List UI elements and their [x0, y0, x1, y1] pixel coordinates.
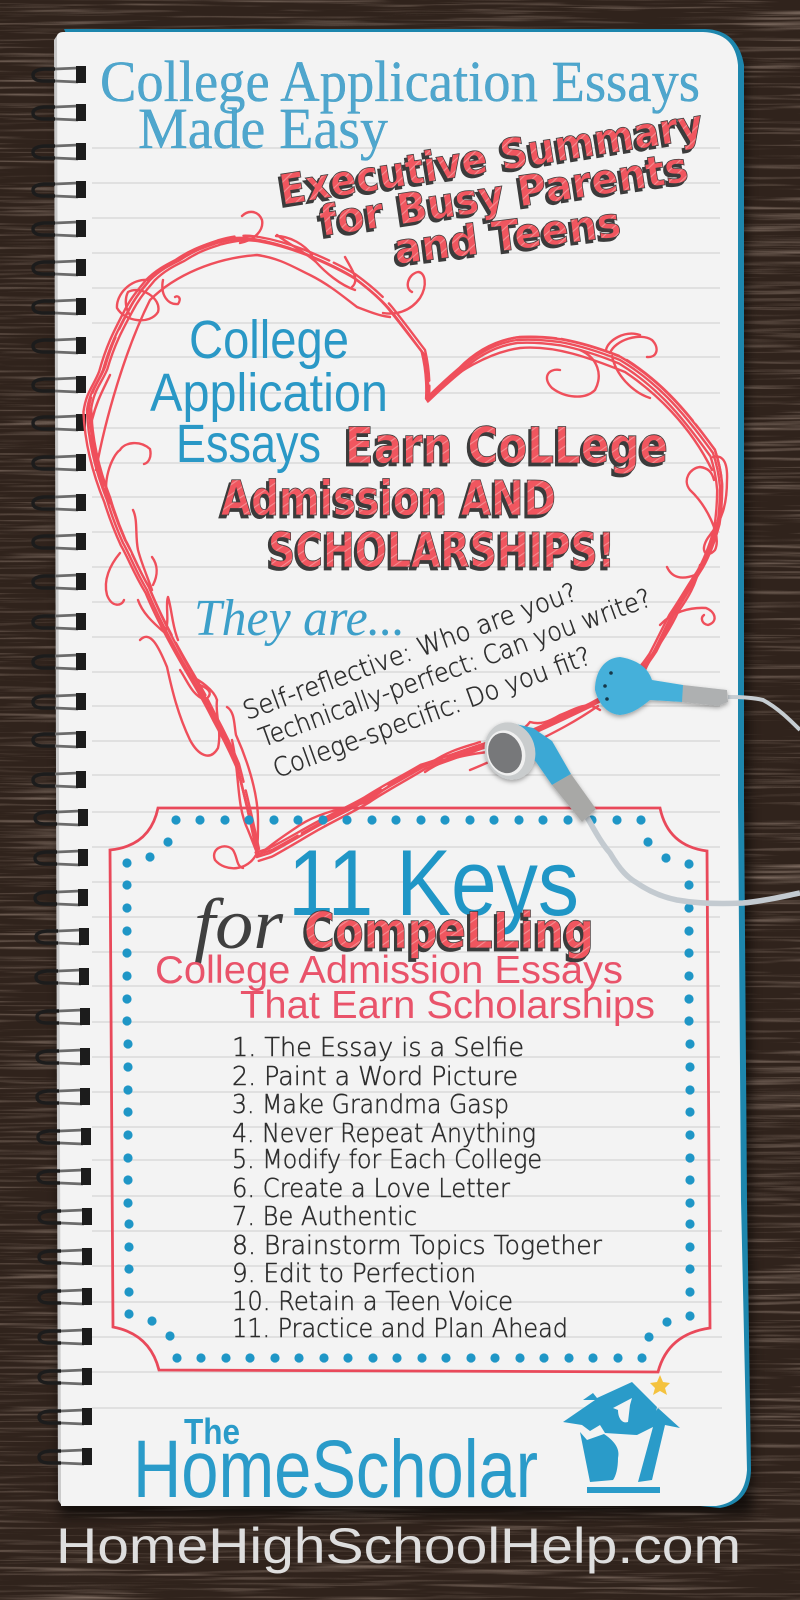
- list of 11 keys: 2. Paint a Word Picture: [232, 1062, 518, 1092]
- heading: college application essays: College: [189, 310, 349, 370]
- heading: earn college admission and scholarships: Admission AND: [221, 471, 556, 527]
- heading: 11 keys: 11 Keys: [288, 830, 579, 935]
- subtitle: executive summary: [276, 100, 706, 274]
- white cutout: [613, 1398, 632, 1422]
- list of 11 keys: 9. Edit to Perfection: [232, 1259, 476, 1289]
- three essay qualities: Technically-perfect: Can you write?: [255, 583, 655, 754]
- list of 11 keys: [232, 1033, 602, 1344]
- logo wordmark: HomeScholar: [133, 1424, 538, 1515]
- list of 11 keys: 7. Be Authentic: [232, 1202, 417, 1232]
- they are: They are...: [194, 590, 405, 647]
- cable: [587, 817, 800, 904]
- roof and upper body: [563, 1382, 657, 1435]
- lower right strands: [425, 706, 600, 772]
- heading: college application essays: [150, 310, 388, 474]
- inner strand, right lobe: [432, 348, 712, 470]
- left small curl: [162, 280, 180, 304]
- title: Made Easy: [138, 96, 388, 161]
- left mid curl: [106, 443, 151, 503]
- paper edge strip: [54, 34, 62, 1506]
- subheading: That Earn Scholarships: [240, 984, 655, 1027]
- top curl: [240, 212, 262, 243]
- list of 11 keys: 6. Create a Love Letter: [232, 1174, 510, 1204]
- inner strand, top left lobe: [96, 255, 390, 470]
- base bar: [587, 1487, 660, 1493]
- star: [650, 1375, 670, 1395]
- compelling: CompeLLing: [304, 902, 594, 960]
- heading: earn college admission and scholarships: Earn CoLLege: [345, 417, 668, 475]
- subtitle: executive summary: for Busy Parents: [316, 142, 691, 246]
- logo wordmark: The: [184, 1411, 240, 1452]
- list of 11 keys: 1. The Essay is a Selfie: [232, 1033, 524, 1063]
- heading: college application essays: Essays: [176, 414, 321, 474]
- title: [100, 49, 700, 161]
- website url: HomeHighSchoolHelp.com: [56, 1518, 741, 1574]
- grey stem: [552, 774, 596, 822]
- right side loops: [687, 456, 727, 554]
- right arrow: [638, 1408, 680, 1482]
- subtitle: executive summary: and Teens: [391, 198, 624, 274]
- three essay qualities: College-specific: Do you fit?: [269, 641, 595, 785]
- blue dotted border: [122, 815, 695, 1363]
- subtitle: executive summary: Executive Summary: [276, 100, 706, 215]
- heading: earn college admission and scholarships: [221, 417, 668, 579]
- blue cover: [64, 29, 751, 1508]
- grey housing: [477, 716, 543, 786]
- right top curl: [383, 272, 425, 314]
- spiral binding: [33, 66, 92, 1465]
- lower body: [580, 1432, 618, 1482]
- ruled lines: [92, 148, 722, 1408]
- right lobe curls: [610, 337, 657, 357]
- heading: college application essays: Application: [150, 363, 388, 423]
- subheading: [155, 949, 655, 1027]
- bottom loop: [214, 846, 257, 868]
- blue stem: [511, 723, 571, 785]
- heart scribble: [82, 212, 727, 868]
- cable: [728, 697, 800, 730]
- list of 11 keys: 10. Retain a Teen Voice: [232, 1287, 513, 1317]
- list of 11 keys: 3. Make Grandma Gasp: [232, 1090, 509, 1120]
- red frame: [110, 808, 710, 1372]
- paper shadow: [60, 60, 752, 1516]
- earbud: lower with cable: [477, 716, 800, 904]
- logo house icon: [563, 1375, 680, 1493]
- list of 11 keys: 4. Never Repeat Anything: [232, 1119, 536, 1149]
- list of 11 keys: 11. Practice and Plan Ahead: [232, 1314, 568, 1344]
- list of 11 keys: 5. Modify for Each College: [232, 1145, 542, 1175]
- paper sheet: [57, 32, 747, 1506]
- title: College Application Essays: [100, 49, 700, 114]
- side strands left: [133, 510, 157, 590]
- heading: earn college admission and scholarships: SCHOLARSHIPS!: [268, 523, 615, 579]
- left knot curl: [117, 280, 158, 320]
- for: for: [194, 884, 284, 964]
- grey stem: [682, 685, 728, 706]
- blue shell: [595, 657, 683, 715]
- earbud: upper with cable: [595, 657, 800, 730]
- list of 11 keys: 8. Brainstorm Topics Together: [232, 1231, 602, 1261]
- subheading: College Admission Essays: [155, 949, 623, 992]
- three essay qualities: Self-reflective: Who are you?: [239, 578, 581, 727]
